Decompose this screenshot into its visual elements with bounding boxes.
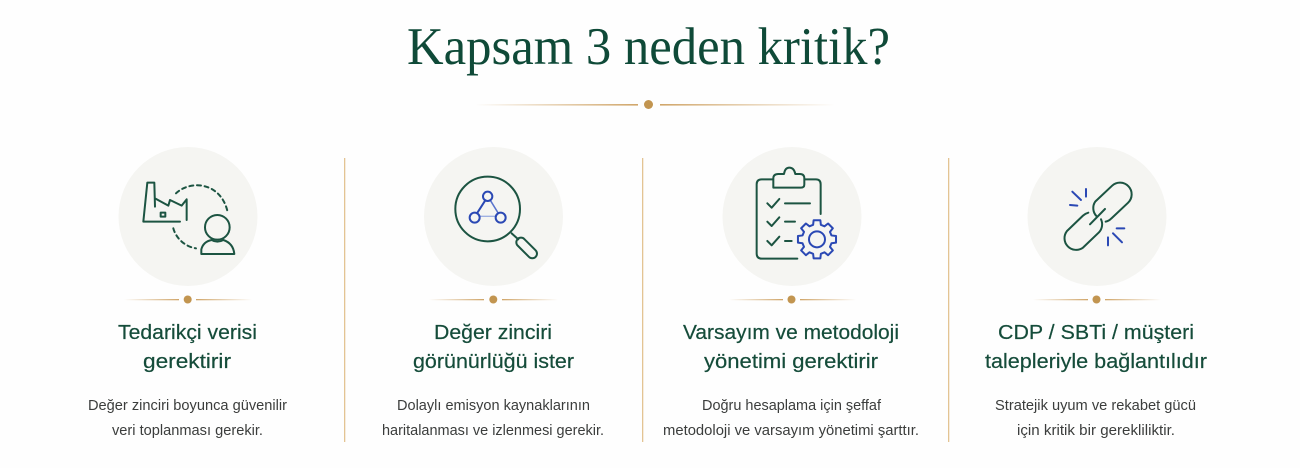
text block: metodoloji ve varsayım yönetimi şarttır. — [663, 423, 919, 439]
text block: veri toplanması gerekir. — [112, 423, 263, 439]
text block — [382, 398, 604, 439]
heading: Değer zinciri — [434, 322, 552, 344]
text block — [663, 398, 919, 439]
heading: görünürlüğü ister — [413, 351, 574, 373]
heading — [118, 322, 257, 373]
text block: için kritik bir gerekliliktir. — [1017, 423, 1175, 439]
text block: haritalanması ve izlenmesi gerekir. — [382, 423, 604, 439]
heading: yönetimi gerektirir — [704, 351, 878, 373]
text block: Dolaylı emisyon kaynaklarının — [397, 398, 590, 414]
heading: Varsayım ve metodoloji — [683, 322, 899, 344]
heading — [985, 322, 1207, 373]
heading: Tedarikçi verisi — [118, 322, 257, 344]
title ornament divider — [475, 100, 835, 109]
heading: CDP / SBTi / müşteri — [998, 322, 1194, 344]
heading — [413, 322, 574, 373]
small divider — [429, 296, 558, 304]
text block: Stratejik uyum ve rekabet gücü — [995, 398, 1196, 414]
panel: value chain visibility — [382, 147, 604, 439]
text block — [995, 398, 1196, 439]
panel: assumptions and methodology — [663, 147, 919, 439]
heading: gerektirir — [143, 351, 231, 373]
text block — [88, 398, 287, 439]
small divider — [124, 296, 252, 304]
icon: factory and person — [118, 147, 258, 286]
text block: Değer zinciri boyunca güvenilir — [88, 398, 287, 414]
small divider — [729, 296, 856, 304]
panel: CDP SBTi customer demands — [985, 147, 1207, 439]
panel: supplier data — [88, 147, 287, 439]
icon: magnifier with network — [424, 147, 563, 286]
icon: clipboard with gear — [722, 147, 862, 286]
heading: talepleriyle bağlantılıdır — [985, 351, 1207, 373]
title: Kapsam 3 neden kritik? — [407, 18, 890, 76]
small divider — [1033, 296, 1161, 304]
heading — [683, 322, 899, 373]
text block: Doğru hesaplama için şeffaf — [702, 398, 882, 414]
icon: broken chain link — [1028, 147, 1166, 286]
